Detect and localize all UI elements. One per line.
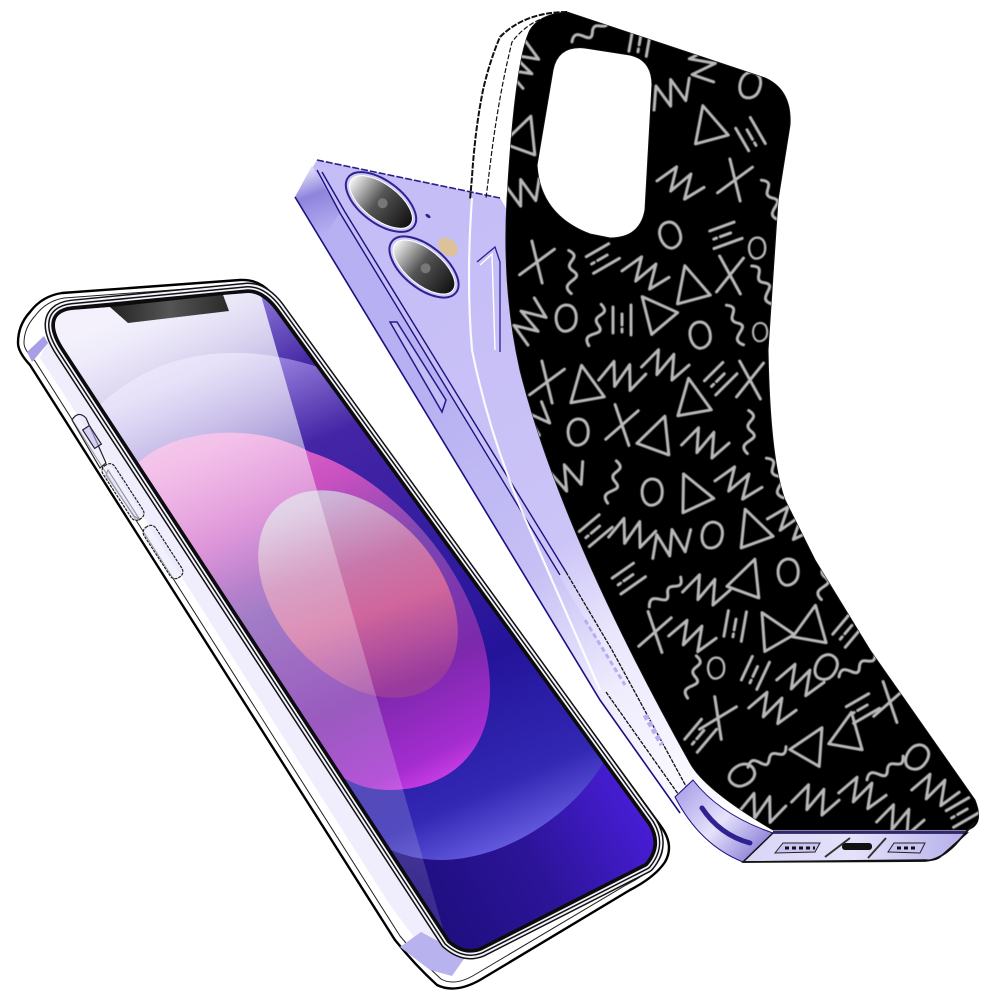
- speaker dots right: [897, 846, 918, 850]
- microphone dot: [425, 213, 431, 219]
- wallpaper pink disc: [136, 433, 490, 790]
- charging port: [842, 843, 872, 850]
- corner slot: [702, 808, 750, 843]
- bottom left lavender corner: [400, 932, 466, 976]
- speaker dots left: [785, 846, 815, 850]
- screen wallpaper: [55, 293, 654, 949]
- wallpaper inner oval: [258, 490, 458, 698]
- front phone with clear case: [18, 270, 700, 989]
- notch: [110, 295, 229, 323]
- lens two: [379, 225, 469, 309]
- bottom blue line: [773, 831, 967, 833]
- side button: [390, 322, 446, 412]
- camera corner band: [295, 166, 340, 240]
- left side lavender frame: [40, 335, 470, 965]
- bottom edge of case and phone: [675, 780, 975, 862]
- bottom strip: [743, 833, 967, 862]
- glass glare: [55, 293, 443, 929]
- inner shell line: [24, 285, 663, 982]
- outer clear rim: [470, 12, 567, 200]
- bezel ring lines: [55, 293, 653, 949]
- lower rail line: [566, 572, 688, 790]
- case button highlight: [480, 254, 495, 350]
- side rail lines: [317, 170, 566, 575]
- lens one: [336, 161, 426, 243]
- phone body: [295, 160, 720, 813]
- engraved side marks: [585, 620, 662, 745]
- top left lavender band: [27, 336, 48, 362]
- inner clear rim: [486, 14, 560, 198]
- side frame: [295, 166, 622, 700]
- outer edge line: [295, 197, 680, 813]
- top edge line: [317, 160, 500, 198]
- wallpaper outer disc: [100, 353, 603, 860]
- corner band with speaker slot: [675, 780, 773, 862]
- middle phone back: [295, 160, 720, 813]
- speaker holes right: [888, 843, 925, 853]
- front case outer shell: [18, 280, 669, 989]
- white rim over phone: [469, 198, 600, 690]
- black patterned case: [496, 12, 979, 839]
- case button outline: [477, 247, 500, 352]
- port opening lines: [825, 838, 886, 858]
- speaker holes left: [775, 843, 820, 853]
- transparent case edge: [469, 12, 600, 690]
- wallpaper lower background: [340, 700, 654, 949]
- case outer bottom rim: [743, 822, 975, 862]
- volume and mute buttons: [72, 414, 185, 581]
- second lower rail line: [606, 692, 688, 808]
- scribble pattern: [496, 18, 979, 839]
- case black back: [506, 12, 979, 830]
- flash: [434, 234, 462, 260]
